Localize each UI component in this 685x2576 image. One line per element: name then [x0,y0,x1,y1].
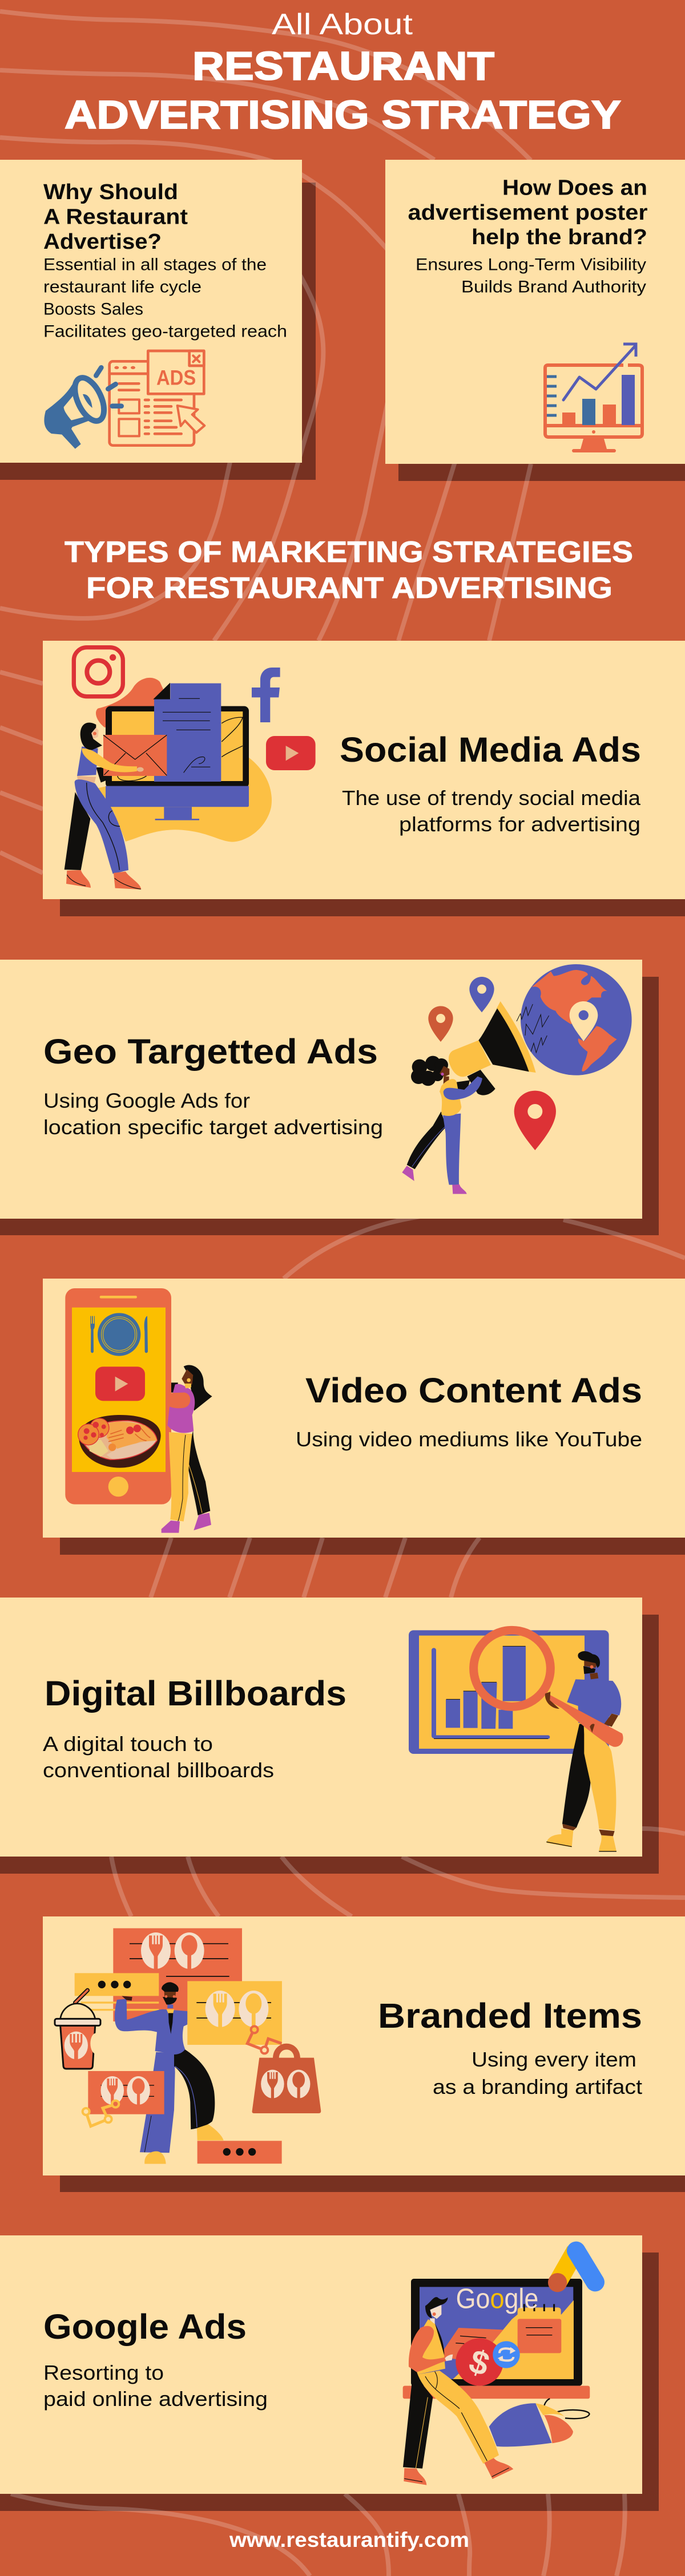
text: geo description [43,1089,383,1139]
text: benefits [416,256,646,297]
text: branded description: Using every item [472,2048,636,2071]
panel: how does a poster help [385,160,685,464]
icon: megaphone and ads window: ADS [156,365,196,389]
text: geo description: location specific target advertising [43,1115,383,1139]
illustration: man with magnifier and bar chart [409,1630,623,1851]
footer: website url: www.restaurantify.com [229,2528,469,2551]
heading: digital billboards: Digital Billboards [45,1674,346,1713]
heading: video content ads: Video Content Ads [305,1371,642,1410]
heading: why should a restaurant advertise: Advertise? [43,230,162,254]
illustration: man at monitor with google ads logo [403,2251,595,2485]
text: google ads description [43,2361,268,2411]
text: digital description: conventional billboards [43,1758,274,1782]
heading: why should a restaurant advertise: Why Should [43,180,178,204]
text: reasons: Facilitates geo-targeted reach [43,322,287,341]
illustration: man at monitor with google ads logo: $ [465,2342,494,2383]
illustration: woman with megaphone, globe and pins [402,964,632,1194]
heading: geo targetted ads: Geo Targetted Ads [43,1032,378,1071]
title: RESTAURANT [192,43,494,88]
heading: how does an advertisement poster help the brand [408,176,648,249]
text: benefits: Ensures Long-Term Visibility [416,256,646,274]
heading: branded items: Branded Items [378,1996,642,2035]
text: reasons: restaurant life cycle [43,277,202,297]
text: branded description [433,2048,642,2098]
panel: why advertise [0,160,302,463]
heading: why should a restaurant advertise [43,180,188,254]
text: google ads description: Resorting to [43,2361,164,2384]
heading: types of marketing strategies: TYPES OF MARKETING STRATEGIES [65,536,633,569]
heading: types of marketing strategies: FOR RESTAURANT ADVERTISING [86,572,613,605]
text: digital description [43,1732,274,1782]
panel: geo targetted ads [0,960,642,1219]
text: social media description [342,786,641,836]
icon: monitor with growth chart [545,344,642,452]
title [65,8,621,137]
text: google ads description: paid online advertising [43,2387,268,2411]
illustration: phone with food video and woman [65,1288,212,1533]
text: reasons: Essential in all stages of the [43,256,267,274]
title: All About [272,8,413,41]
illustration: man with branded cards, cup and bag [55,1928,321,2164]
text: benefits: Builds Brand Authority [461,277,646,297]
heading: how does an advertisement poster help the brand: help the brand? [472,225,647,249]
title: ADVERTISING STRATEGY [65,92,621,137]
text: reasons: Boosts Sales [43,300,143,318]
panel: video content ads [43,1279,685,1538]
text: digital description: A digital touch to [43,1732,213,1756]
panel: social media ads [43,641,685,899]
panel: google ads [0,2235,642,2494]
text: video description: Using video mediums like YouTube [296,1427,642,1451]
text: social media description: platforms for advertising [399,812,640,836]
heading: google ads: Google Ads [43,2307,247,2346]
panel: branded items [43,1916,685,2175]
text: geo description: Using Google Ads for [43,1089,250,1113]
icon: megaphone and ads window [44,351,204,449]
illustration: man at monitor with google ads logo: Google [456,2283,538,2315]
heading: how does an advertisement poster help the brand: How Does an [502,176,647,200]
text: reasons [43,256,287,341]
heading: why should a restaurant advertise: A Restaurant [43,205,188,229]
text: branded description: as a branding artifact [433,2075,642,2098]
heading: types of marketing strategies [65,536,633,605]
illustration: woman with monitor and social icons [65,648,316,889]
text: social media description: The use of trendy social media [342,786,641,810]
heading: social media ads: Social Media Ads [340,730,641,769]
panel: digital billboards [0,1598,642,1857]
heading: how does an advertisement poster help the brand: advertisement poster [408,201,648,225]
